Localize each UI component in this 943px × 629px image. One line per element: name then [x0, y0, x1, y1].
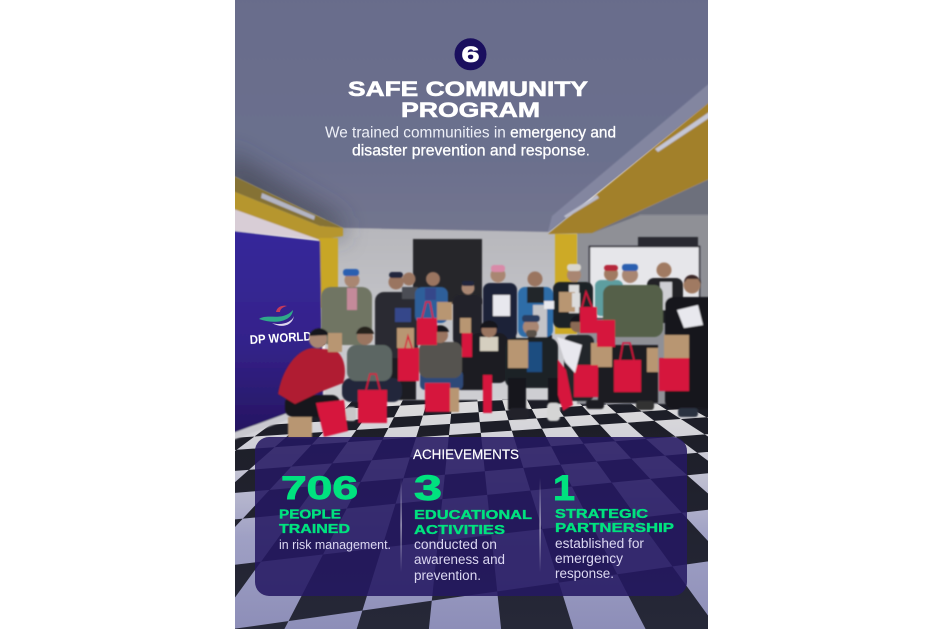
person: green jacket — [321, 269, 372, 345]
stat: 706 people trained — [279, 470, 391, 552]
person: white cap — [553, 264, 593, 328]
ceiling — [225, 0, 718, 232]
blind — [638, 237, 698, 246]
stat: 1 strategic partnership: PARTNERSHIP — [555, 521, 674, 535]
banner logo — [259, 306, 294, 326]
red gift bags — [316, 307, 689, 437]
group of people — [278, 262, 718, 438]
stat: 706 people trained: TRAINED — [279, 522, 350, 536]
right beam lamps — [654, 111, 708, 153]
booklets and papers — [395, 288, 703, 373]
stat: 1 strategic partnership: response. — [555, 566, 614, 581]
subtitle: We trained communities in emergency and — [325, 124, 616, 142]
shoes — [346, 400, 698, 421]
left yellow pillar — [319, 238, 338, 308]
title: SAFE COMMUNITY — [348, 78, 588, 101]
stat: 1 strategic partnership — [553, 469, 674, 581]
bag handles — [366, 292, 634, 390]
person: woman right — [664, 274, 708, 410]
person: grey shirt woman — [342, 326, 402, 402]
whiteboard — [590, 246, 700, 318]
right yellow pillar — [555, 234, 577, 334]
back wall — [324, 216, 578, 401]
stat: 1 strategic partnership: 1 — [553, 469, 575, 508]
ceiling shadow left — [225, 150, 343, 240]
person: behind — [402, 272, 418, 299]
person: bearded man — [505, 315, 564, 410]
achievements panel — [255, 437, 687, 596]
back door — [413, 239, 482, 304]
person: bald man — [647, 262, 683, 323]
subtitle: disaster prevention and response . — [352, 142, 590, 160]
stat: 3 educational activities — [414, 469, 532, 583]
stat: 706 people trained: 706 — [281, 470, 358, 506]
stat: 706 people trained: PEOPLE — [279, 508, 341, 522]
column dividers — [400, 478, 541, 572]
stat: 1 strategic partnership: emergency — [555, 551, 623, 566]
person: blue jacket — [415, 272, 448, 323]
title: PROGRAM — [401, 99, 540, 122]
left window gap — [235, 208, 320, 241]
person: vest — [483, 265, 517, 339]
back row legs — [384, 335, 658, 403]
subtitle — [325, 124, 616, 160]
left beam lamp — [261, 193, 315, 220]
panel background — [255, 437, 687, 596]
stat: 3 educational activities: 3 — [414, 469, 442, 508]
stat: 3 educational activities: conducted on — [414, 537, 497, 552]
checkered floor — [235, 343, 708, 629]
stat: 3 educational activities: prevention. — [414, 568, 481, 583]
title — [348, 78, 588, 122]
banner wordmark: DP WORLD — [249, 329, 312, 347]
under-beam ceiling — [598, 178, 708, 231]
stat: 3 educational activities: ACTIVITIES — [414, 523, 505, 537]
person: short dark coat — [453, 281, 482, 345]
number badge: 6 — [462, 42, 480, 67]
light ceiling wedge — [548, 84, 708, 232]
person: red track jacket — [278, 328, 345, 417]
number badge — [454, 38, 486, 70]
person: teal jacket — [595, 265, 623, 316]
person: blue-black jacket — [518, 272, 553, 337]
DP World banner — [235, 230, 324, 434]
kraft paper bags — [288, 292, 689, 438]
stat: 3 educational activities: awareness and — [414, 552, 505, 567]
person: crouching right — [564, 315, 594, 401]
left yellow beam front face — [235, 191, 344, 240]
person: woman black and cream — [478, 320, 507, 384]
panel heading: ACHIEVEMENTS — [413, 446, 519, 462]
photo: room background — [225, 0, 718, 443]
banner base — [235, 412, 289, 440]
person: black jacket — [375, 272, 418, 358]
stat: 706 people trained: in risk management. — [279, 537, 391, 552]
person: olive shirt — [603, 264, 663, 337]
stat: 3 educational activities: EDUCATIONAL — [414, 508, 532, 522]
left yellow beam top face — [235, 176, 343, 228]
person: patterned jacket — [419, 325, 463, 390]
right side wall — [577, 214, 718, 404]
stat: 1 strategic partnership: STRATEGIC — [555, 507, 648, 521]
right yellow beam — [548, 95, 718, 234]
stat: 1 strategic partnership: established for — [555, 536, 645, 551]
